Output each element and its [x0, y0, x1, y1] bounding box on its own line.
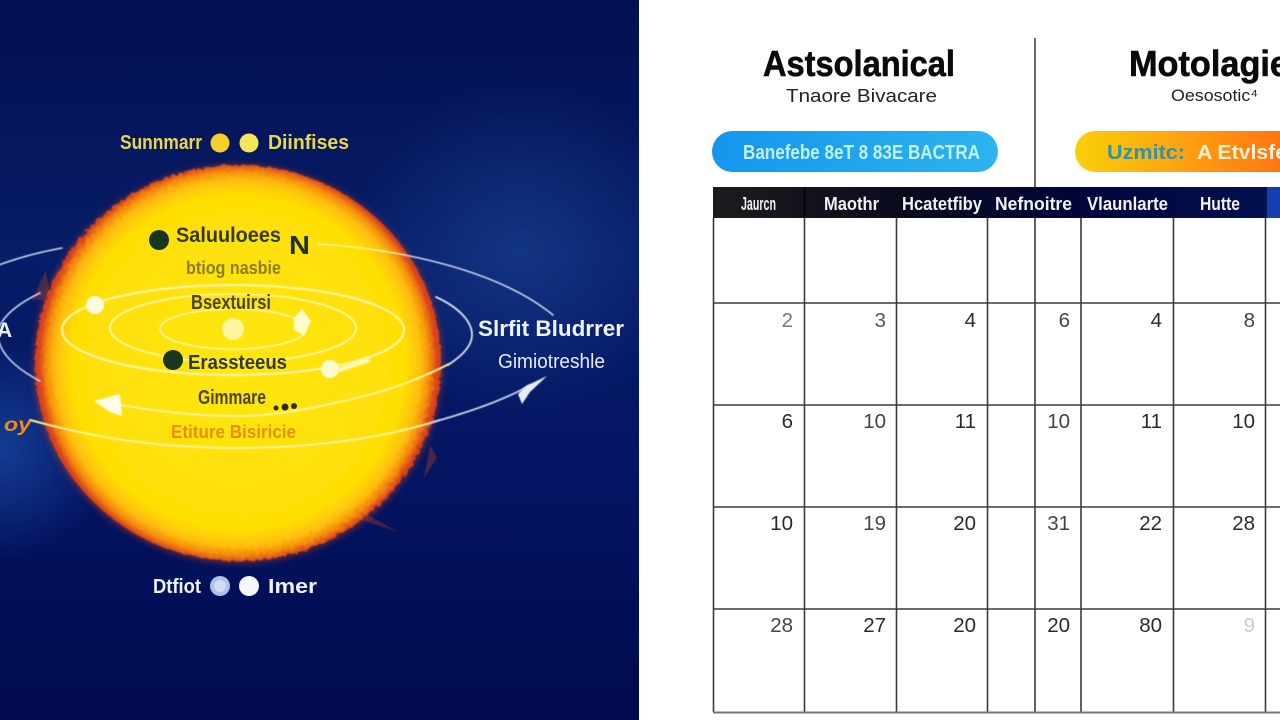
- pill: orange banner: [1075, 131, 1280, 172]
- calendar header row: Maothr: [824, 194, 879, 214]
- calendar numbers: 10: [770, 512, 793, 535]
- calendar numbers: 2: [782, 309, 793, 332]
- calendar header row: [713, 187, 1280, 218]
- calendar numbers: [770, 309, 1255, 637]
- planet labels on sun: Bsextuirsi: [191, 292, 271, 314]
- heading: top legend: [120, 132, 349, 154]
- planet labels on sun: Erassteeus: [188, 352, 287, 374]
- calendar numbers: 6: [1059, 309, 1070, 332]
- heading: top legend: Sunnmarr: [120, 132, 202, 154]
- calendar numbers: 19: [863, 512, 886, 535]
- calendar header row: Nefnoitre: [995, 194, 1072, 214]
- calendar numbers: 4: [1151, 309, 1162, 332]
- calendar numbers: 28: [770, 614, 793, 637]
- legend: bottom: Imer: [268, 576, 317, 598]
- planet labels on sun: Saluuloees: [176, 224, 281, 247]
- pill: blue banner: Banefebe 8eT 8 83E BACTRA: [743, 142, 980, 164]
- calendar numbers: 20: [953, 512, 976, 535]
- calendar numbers: 80: [1139, 614, 1162, 637]
- legend: bottom: Dtfiot: [153, 576, 201, 598]
- calendar numbers: 3: [875, 309, 886, 332]
- calendar numbers: 10: [1047, 410, 1070, 433]
- icon: sun glow and corona: [32, 164, 443, 564]
- callout: left edge labels: [0, 319, 33, 436]
- calendar numbers: 27: [863, 614, 886, 637]
- planet labels on sun: N: [289, 230, 310, 260]
- planet labels on sun: Etiture Bisiricie: [171, 422, 296, 442]
- pill: blue banner: [712, 131, 998, 172]
- calendar numbers: 4: [965, 309, 976, 332]
- heading: top legend: Diinfises: [268, 132, 349, 154]
- heading: meteorological: Oesosotic⁴: [1171, 86, 1258, 105]
- panel: solar system: [0, 0, 639, 720]
- calendar numbers: 20: [1047, 614, 1070, 637]
- calendar numbers: 11: [955, 410, 976, 433]
- calendar numbers: 22: [1139, 512, 1162, 535]
- callout: right orbit label: [478, 316, 624, 373]
- calendar numbers: 6: [782, 410, 793, 433]
- heading: astronomical: [763, 43, 955, 106]
- calendar numbers: 11: [1141, 410, 1162, 433]
- calendar numbers: 10: [863, 410, 886, 433]
- pill: orange banner: Uzmitc:: [1107, 142, 1185, 164]
- calendar numbers: 10: [1232, 410, 1255, 433]
- legend: bottom: [153, 576, 317, 598]
- pill: orange banner: A Etvlsfe: [1197, 142, 1280, 164]
- calendar numbers: 8: [1244, 309, 1255, 332]
- calendar numbers: 28: [1232, 512, 1255, 535]
- calendar header row: Jaurcn: [741, 194, 776, 214]
- planets and craft on orbits: [86, 296, 547, 416]
- planet labels on sun: [149, 224, 310, 442]
- calendar header row: Vlaunlarte: [1087, 194, 1168, 214]
- heading: astronomical: Tnaore Bivacare: [786, 86, 937, 106]
- heading: meteorological: [1129, 43, 1280, 105]
- calendar numbers: 9: [1244, 614, 1255, 637]
- callout: right orbit label: Gimiotreshle: [498, 351, 605, 373]
- calendar grid: [713, 218, 1280, 712]
- calendar header row: Hcatetfiby: [902, 194, 982, 214]
- planet labels on sun: btiog nasbie: [186, 258, 281, 278]
- planet labels on sun: Gimmare: [198, 387, 266, 409]
- divider between headings: [1034, 38, 1036, 187]
- orbit lines: [0, 244, 553, 448]
- callout: left edge labels: oy: [4, 415, 33, 436]
- callout: right orbit label: Slrfit Bludrrer: [478, 316, 624, 341]
- calendar numbers: 20: [953, 614, 976, 637]
- panel: calendar: [712, 38, 1280, 712]
- calendar header row: Hutte: [1200, 194, 1240, 214]
- calendar numbers: 31: [1047, 512, 1070, 535]
- heading: astronomical: Astsolanical: [763, 43, 955, 84]
